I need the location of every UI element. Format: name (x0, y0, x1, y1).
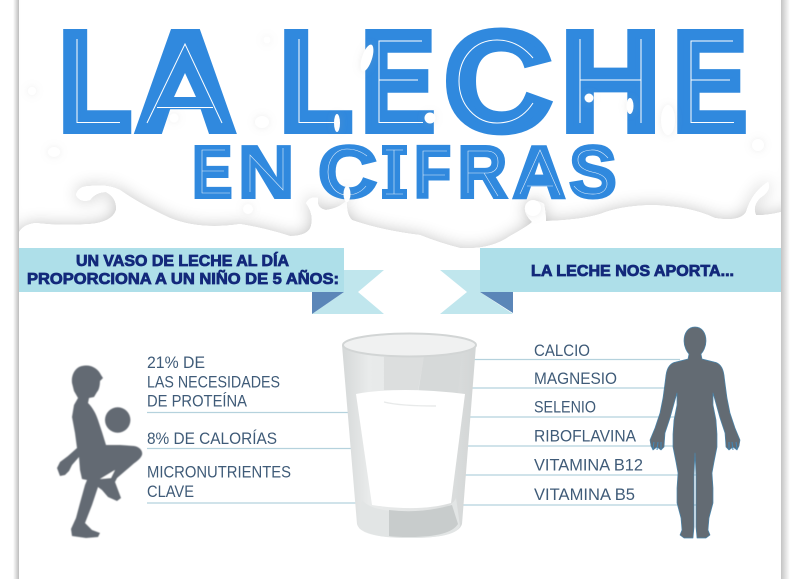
ribbon right (440, 248, 781, 314)
text: left list: LAS NECESIDADES (147, 373, 280, 392)
title: EN CIFRAS: S (570, 133, 616, 213)
fingers (653, 442, 737, 450)
text: right list: RIBOFLAVINA (534, 426, 637, 446)
title: LA LECHE: E (673, 2, 747, 160)
text: left list: 8% DE CALORÍAS (147, 429, 277, 448)
title: EN CIFRAS: R (458, 132, 507, 212)
title: EN CIFRAS: E (192, 133, 232, 213)
heading: right ribbon: LA LECHE NOS APORTA... (531, 263, 734, 280)
title: LA LECHE: C (444, 3, 552, 160)
title: LA LECHE: L (59, 3, 132, 160)
milk drops (28, 36, 764, 216)
title: LA LECHE: L (280, 3, 353, 160)
glass of milk (342, 334, 476, 538)
heading: left ribbon: PROPORCIONA A UN NIÑO DE 5 AÑOS: (27, 268, 339, 288)
text: left list: CLAVE (147, 482, 194, 501)
title: LA LECHE (59, 2, 747, 160)
title: EN CIFRAS (192, 132, 616, 213)
heading: left ribbon (27, 251, 339, 288)
title: EN CIFRAS: I (385, 133, 403, 213)
text: right list: CALCIO (534, 341, 590, 360)
text: left list (147, 353, 291, 501)
inline strokes on the lettering (77, 39, 734, 196)
ball (105, 407, 130, 433)
milk splash (19, 178, 781, 248)
title: LA LECHE: H (561, 3, 660, 160)
title: EN CIFRAS: F (414, 133, 451, 213)
title: LA LECHE: E (361, 2, 435, 160)
text: right list: VITAMINA B5 (534, 485, 635, 504)
text: left list: MICRONUTRIENTES (147, 463, 291, 482)
text: right list: VITAMINA B12 (534, 456, 643, 475)
title: LA LECHE: A (136, 3, 235, 160)
connector lines (147, 360, 700, 505)
title: EN CIFRAS: C (318, 133, 377, 213)
title: EN CIFRAS: N (238, 132, 294, 212)
text: left list: DE PROTEÍNA (147, 392, 248, 411)
text: right list: MAGNESIO (534, 369, 617, 388)
icon: adult body (650, 327, 740, 538)
ribbon left (19, 248, 384, 314)
text: right list (534, 341, 643, 504)
text: right list: SELENIO (534, 398, 596, 417)
title: EN CIFRAS: A (513, 133, 565, 213)
heading: left ribbon: UN VASO DE LECHE AL DÍA (76, 251, 289, 270)
text: left list: 21% DE (147, 353, 205, 372)
milk in the glass (356, 390, 465, 508)
glass rim (343, 334, 476, 356)
icon: child with ball (57, 365, 142, 538)
